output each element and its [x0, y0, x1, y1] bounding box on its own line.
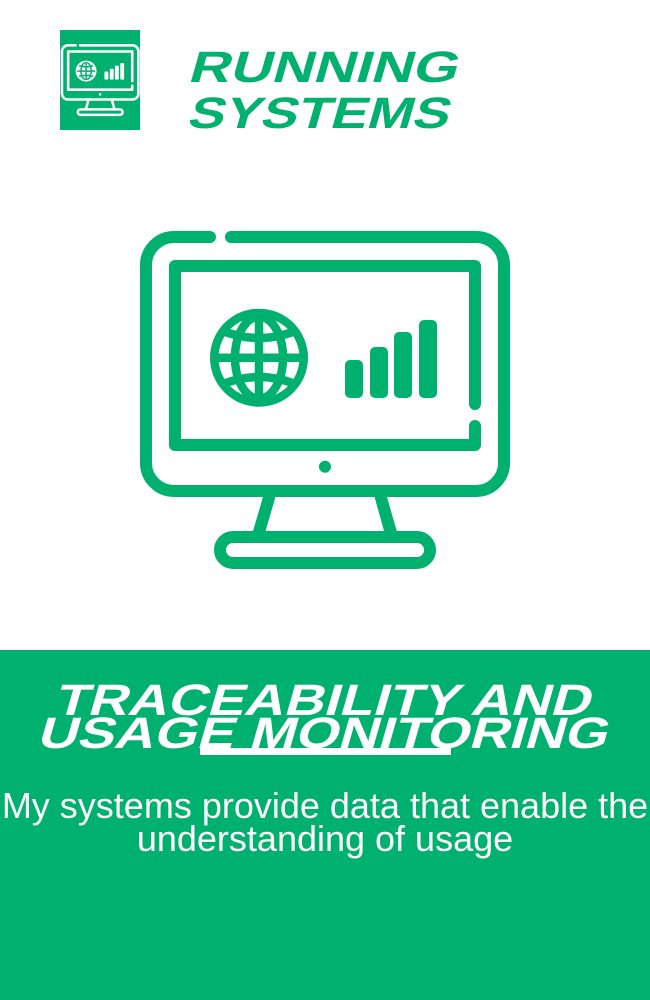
heading: traceability and usage monitoring: USAGE MONITORING: [33, 708, 618, 758]
body text: My systems provide data that enable the: [2, 785, 648, 826]
panel: green caption: [0, 650, 650, 1000]
icon: signal bars: [345, 320, 437, 398]
heading: traceability and usage monitoring: TRACEABILITY AND: [50, 675, 601, 725]
logo title: RUNNING SYSTEMS: SYSTEMS: [183, 88, 459, 138]
body text: [2, 785, 648, 859]
logo title: RUNNING SYSTEMS: [183, 42, 468, 138]
logo icon: monitor on green tile: [60, 30, 140, 130]
heading: traceability and usage monitoring: [33, 675, 618, 758]
main icon: desktop monitor: [146, 237, 504, 563]
icon: globe: [210, 309, 308, 407]
logo title: RUNNING SYSTEMS: RUNNING: [184, 42, 468, 92]
body text: understanding of usage: [137, 818, 513, 859]
